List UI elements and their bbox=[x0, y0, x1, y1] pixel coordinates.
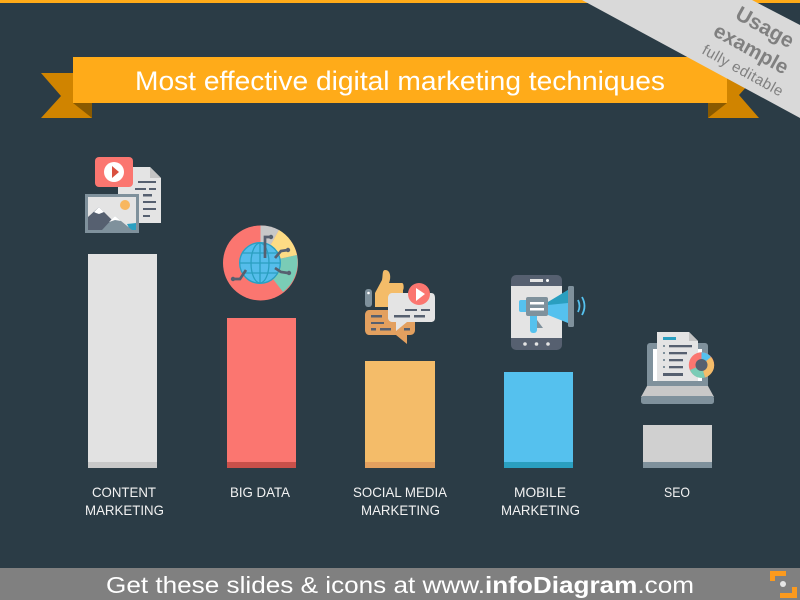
label: content marketing: CONTENT bbox=[92, 484, 156, 500]
icon: social media bbox=[365, 270, 435, 344]
label: social media marketing: MARKETING bbox=[361, 502, 440, 518]
corner banner: usage example: fully editable bbox=[699, 42, 786, 100]
label: big data: BIG DATA bbox=[230, 484, 291, 500]
label: social media marketing bbox=[353, 484, 448, 518]
title ribbon bbox=[41, 57, 759, 118]
footer text: Get these slides & icons at www. infoDiagram .com bbox=[106, 572, 694, 598]
footer bar bbox=[0, 568, 800, 600]
label: mobile marketing bbox=[501, 484, 580, 518]
bar: content marketing bbox=[88, 254, 157, 468]
label: seo: SEO bbox=[664, 484, 690, 500]
label: mobile marketing: MOBILE bbox=[514, 484, 566, 500]
icon: big data bbox=[223, 225, 298, 300]
label: content marketing bbox=[85, 484, 164, 518]
icon: content marketing bbox=[85, 157, 161, 233]
bar: mobile marketing bbox=[504, 372, 573, 468]
corner banner: usage example bbox=[582, 0, 800, 118]
bar: social media marketing bbox=[365, 361, 435, 468]
corner banner: usage example: Usage bbox=[732, 2, 798, 53]
label: content marketing: MARKETING bbox=[85, 502, 164, 518]
label: social media marketing: SOCIAL MEDIA bbox=[353, 484, 448, 500]
icon: infoDiagram logo bbox=[772, 574, 794, 596]
title: Most effective digital marketing techniques bbox=[135, 66, 665, 96]
bar: seo bbox=[643, 425, 712, 468]
label: mobile marketing: MARKETING bbox=[501, 502, 580, 518]
icon: mobile marketing bbox=[511, 275, 584, 350]
bar: big data bbox=[227, 318, 296, 468]
icon: seo bbox=[641, 332, 714, 404]
corner banner: usage example: example bbox=[710, 19, 793, 79]
